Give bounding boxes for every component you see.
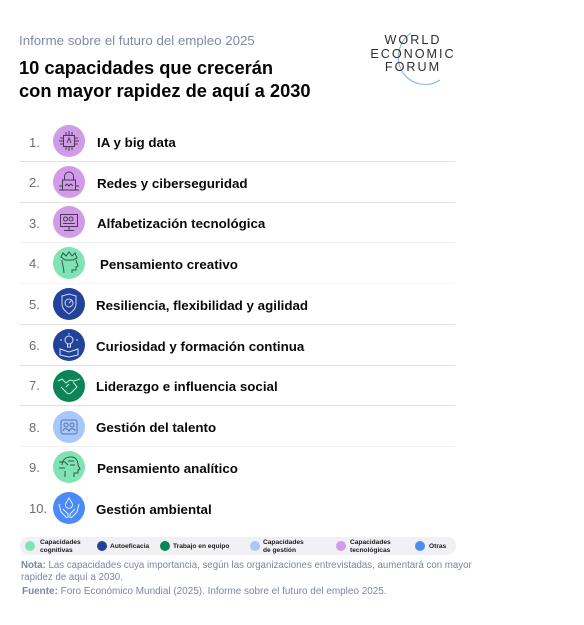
row 4: Pensamiento creativo: 4. <box>29 256 40 271</box>
icon: creative head <box>53 247 85 279</box>
legend: management: Capacidades <box>263 539 304 546</box>
row 5: Resiliencia, flexibilidad y agilidad: Resiliencia, flexibilidad y agilidad <box>96 298 308 313</box>
legend: cognitive: cognitivas <box>40 547 73 554</box>
row 6: Curiosidad y formación continua: 6. <box>29 338 40 353</box>
row 5: Resiliencia, flexibilidad y agilidad <box>29 288 308 320</box>
logo: World Economic Forum: ECONOMIC <box>370 46 456 60</box>
row 8: Gestión del talento: 8. <box>29 420 40 435</box>
row 7: Liderazgo e influencia social <box>29 370 278 402</box>
row 1: IA y big data: IA y big data <box>97 135 176 150</box>
row 6: Curiosidad y formación continua: Curiosidad y formación continua <box>96 339 304 354</box>
row 2: Redes y ciberseguridad <box>29 166 248 198</box>
logo: World Economic Forum: WORLD <box>385 33 441 47</box>
row 3: Alfabetización tecnológica: Alfabetización tecnológica <box>97 216 265 231</box>
row 4: Pensamiento creativo <box>29 247 238 279</box>
row 10: Gestión ambiental <box>29 492 212 524</box>
legend: management <box>250 539 304 554</box>
row 1: IA y big data <box>29 125 176 157</box>
row 3: Alfabetización tecnológica <box>29 206 266 238</box>
source: Fuente: Foro Económico Mundial (2025). Informe sobre el futuro del empleo 2025. <box>22 586 387 597</box>
row 10: Gestión ambiental: 10. <box>29 501 47 516</box>
legend: teamwork <box>160 541 230 551</box>
row 3: Alfabetización tecnológica: 3. <box>29 216 40 231</box>
row 9: Pensamiento analítico: Pensamiento analítico <box>97 461 238 476</box>
icon: handshake <box>53 370 85 402</box>
icon: hands holding drop <box>53 492 85 524</box>
legend: technology: tecnológicas <box>350 547 390 554</box>
icon: AI chip <box>53 125 85 157</box>
title: 10 capacidades que crecerán <box>19 57 273 78</box>
legend: teamwork: Trabajo en equipo <box>173 543 229 550</box>
row 2: Redes y ciberseguridad: Redes y ciberseguridad <box>97 176 248 191</box>
icon: shield <box>53 288 85 320</box>
logo: World Economic Forum: FORUM <box>385 60 441 74</box>
icon: analytic head <box>53 451 85 483</box>
legend: self-efficacy <box>97 541 150 551</box>
row dividers <box>20 161 455 162</box>
logo: World Economic Forum <box>370 32 456 85</box>
icon: padlock <box>53 166 85 198</box>
note: rapidez de aquí a 2030. <box>21 572 123 583</box>
row 10: Gestión ambiental: Gestión ambiental <box>96 502 212 517</box>
legend <box>20 537 456 555</box>
row 8: Gestión del talento: Gestión del talento <box>96 420 216 435</box>
row 2: Redes y ciberseguridad: 2. <box>29 175 40 190</box>
row 4: Pensamiento creativo: Pensamiento creativo <box>100 257 238 272</box>
legend: others <box>415 541 446 551</box>
note: Nota: Las capacidades cuya importancia, según las organizaciones entrevistadas, aumentará con mayor <box>21 560 472 571</box>
row 1: IA y big data: 1. <box>29 135 40 150</box>
legend: cognitive <box>25 539 81 554</box>
title <box>19 57 311 101</box>
legend: management: de gestión <box>263 547 296 554</box>
row 8: Gestión del talento <box>29 411 216 443</box>
legend: technology: Capacidades <box>350 539 391 546</box>
legend: others: Otras <box>429 543 446 550</box>
legend: self-efficacy: Autoeficacia <box>110 543 149 550</box>
report subtitle: Informe sobre el futuro del empleo 2025 <box>19 33 255 48</box>
icon: talent group <box>53 411 85 443</box>
note <box>21 560 472 583</box>
legend: technology <box>336 539 391 554</box>
icon: monitor <box>53 206 85 238</box>
title: con mayor rapidez de aquí a 2030 <box>19 80 311 100</box>
row 6: Curiosidad y formación continua <box>29 329 304 361</box>
row 5: Resiliencia, flexibilidad y agilidad: 5. <box>29 297 40 312</box>
row 7: Liderazgo e influencia social: Liderazgo e influencia social <box>96 379 278 394</box>
row 9: Pensamiento analítico <box>29 451 238 483</box>
icon: light bulb and book <box>53 329 85 361</box>
row 9: Pensamiento analítico: 9. <box>29 460 40 475</box>
legend: cognitive: Capacidades <box>40 539 81 546</box>
row 7: Liderazgo e influencia social: 7. <box>29 378 40 393</box>
